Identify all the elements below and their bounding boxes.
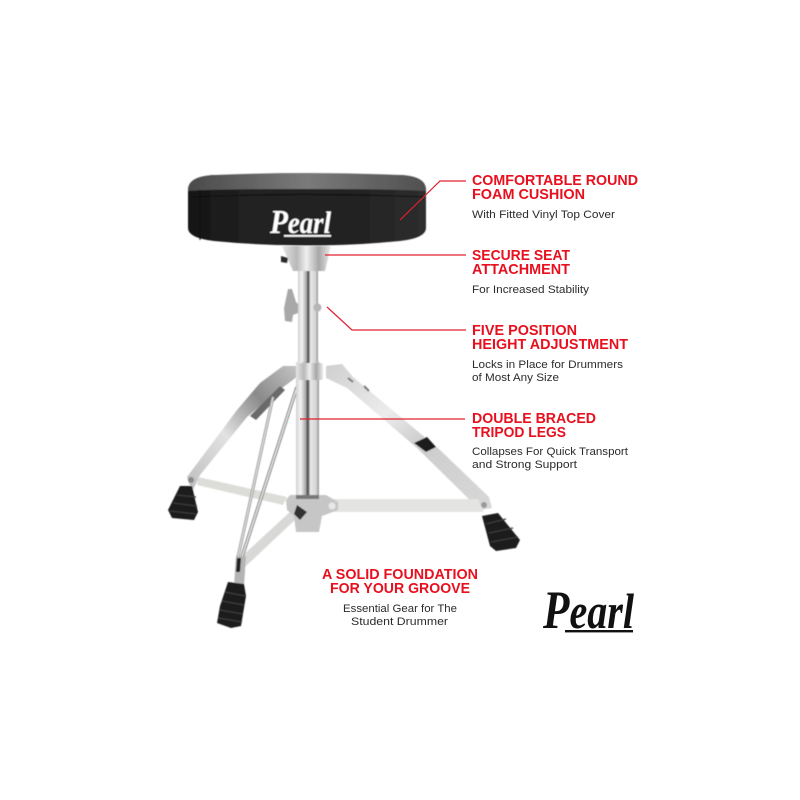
callout: solid foundation (322, 566, 478, 628)
front brace (240, 510, 297, 566)
seat cushion (188, 173, 426, 246)
callout: cushion (472, 172, 638, 221)
left leg (187, 366, 298, 492)
callout: tripod legs: TRIPOD LEGS (472, 424, 566, 441)
leader line: height adjustment (327, 307, 466, 330)
callout: height adjustment: Locks in Place for Drummers (472, 359, 624, 371)
callout: solid foundation: Student Drummer (351, 616, 448, 628)
right brace (330, 499, 484, 512)
upper leg clamp (296, 363, 323, 380)
callout: cushion: FOAM CUSHION (472, 186, 585, 203)
callout: cushion: With Fitted Vinyl Top Cover (472, 209, 615, 221)
callout: height adjustment: HEIGHT ADJUSTMENT (472, 336, 628, 353)
left brace (197, 477, 287, 505)
rubber foot: front (217, 582, 246, 628)
callout: tripod legs (472, 410, 628, 471)
seat logo: Pearl (269, 204, 331, 241)
callout: solid foundation: Essential Gear for The (343, 603, 457, 615)
callout: height adjustment (472, 322, 628, 384)
front leg rods (234, 387, 297, 586)
lower hub (286, 495, 338, 532)
callout: tripod legs: DOUBLE BRACED (472, 410, 596, 427)
callout: seat attachment: ATTACHMENT (472, 261, 570, 278)
rubber foot: right (482, 513, 520, 551)
seat collar (282, 246, 331, 271)
callout: tripod legs: Collapses For Quick Transport (472, 446, 628, 458)
callout: tripod legs: and Strong Support (472, 459, 577, 471)
logo: Pearl: Pearl (542, 580, 634, 640)
callout: cushion: COMFORTABLE ROUND (472, 172, 638, 189)
tripod legs (168, 364, 520, 628)
right leg (326, 364, 492, 510)
callout: solid foundation: A SOLID FOUNDATION (322, 566, 478, 583)
callout: seat attachment: SECURE SEAT (472, 247, 570, 264)
leader line: legs (300, 418, 465, 420)
leader line: cushion (400, 181, 466, 220)
callout: height adjustment: of Most Any Size (472, 372, 559, 384)
callout: height adjustment: FIVE POSITION (472, 322, 577, 339)
leader line: attachment (325, 254, 466, 256)
height adjustment wing bolt (284, 289, 322, 322)
callout: solid foundation: FOR YOUR GROOVE (330, 580, 470, 597)
rubber foot: left (168, 486, 198, 520)
callout: seat attachment (472, 247, 590, 296)
callout: seat attachment: For Increased Stability (472, 284, 590, 296)
centre post (286, 271, 338, 532)
product photo: drum throne (168, 173, 520, 628)
side knob (281, 256, 288, 263)
